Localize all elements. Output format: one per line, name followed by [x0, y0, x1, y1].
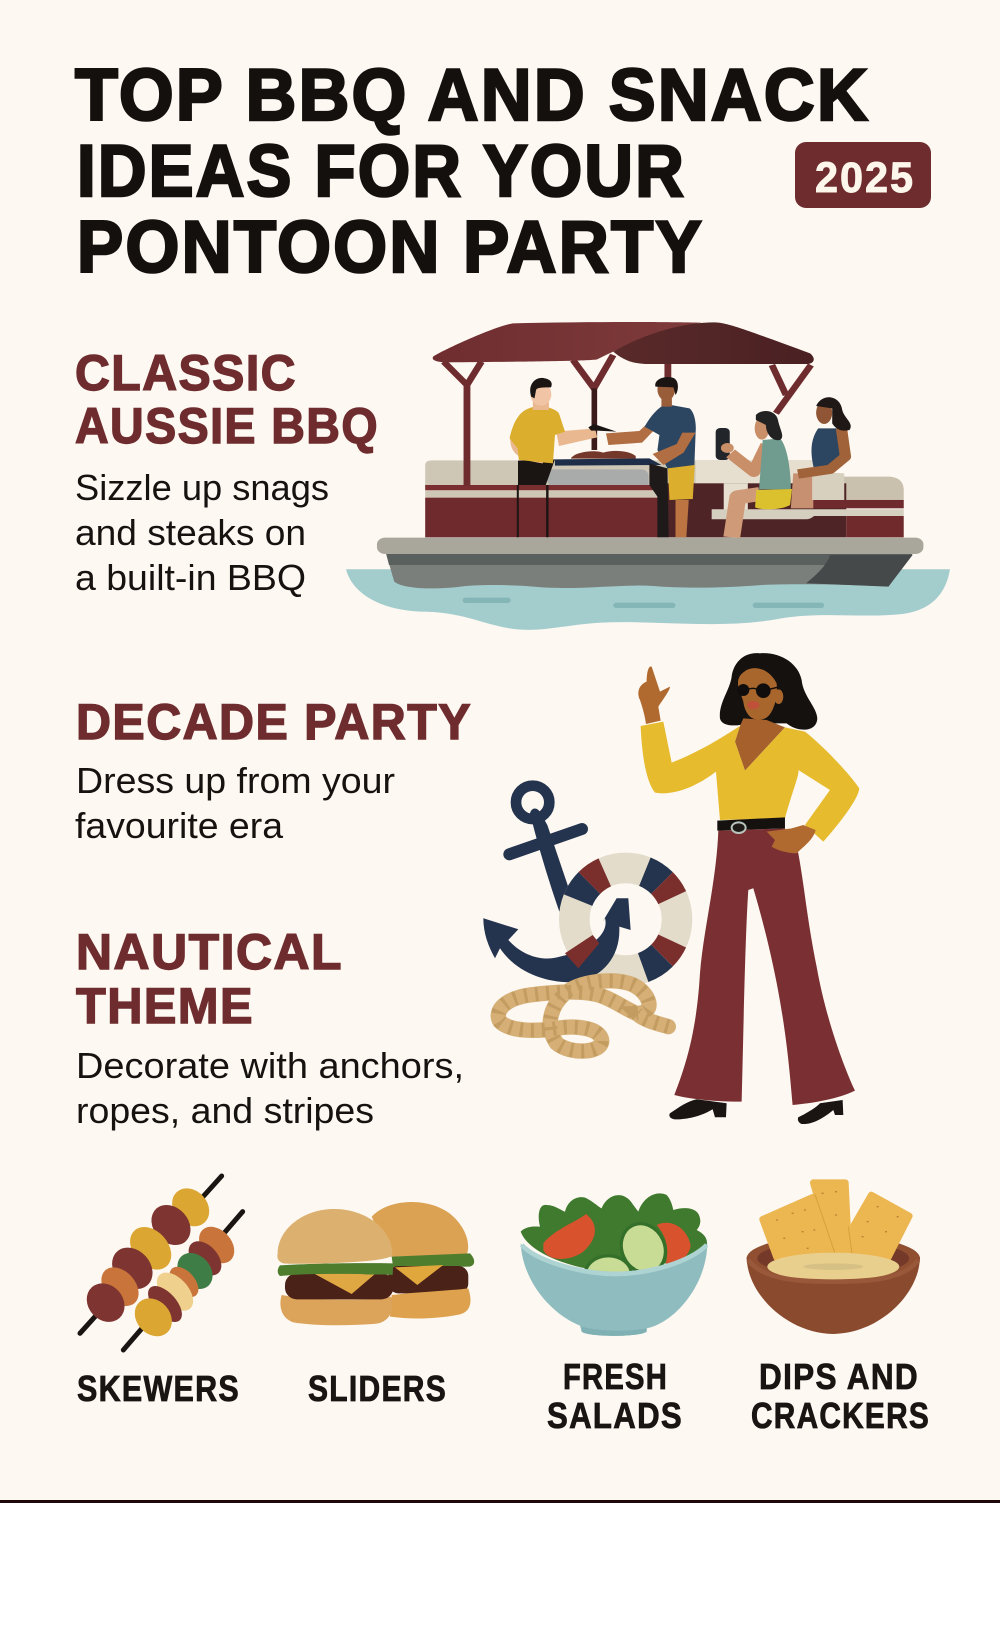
snack: dips and crackers	[747, 1183, 930, 1436]
icon: salad bowl	[521, 1193, 707, 1336]
text: decade party description: favourite era	[75, 805, 284, 846]
text: classic aussie bbq description: and steaks on	[75, 512, 306, 553]
yellow shirt	[641, 722, 859, 842]
label: dips and crackers: DIPS AND	[759, 1356, 919, 1397]
label: dips and crackers: CRACKERS	[751, 1395, 930, 1436]
section: classic aussie bbq	[75, 345, 379, 598]
title: TOP BBQ AND SNACK	[75, 55, 870, 136]
text: classic aussie bbq description: Sizzle up snags	[75, 467, 329, 508]
snack: fresh salads	[521, 1193, 707, 1436]
heading: classic aussie bbq: AUSSIE BBQ	[75, 398, 379, 454]
face and chest	[735, 668, 785, 771]
label: sliders: SLIDERS	[308, 1368, 447, 1409]
flared trousers	[674, 828, 855, 1105]
canopy and supports	[433, 322, 814, 486]
heading: classic aussie bbq	[75, 345, 379, 454]
snack: skewers	[77, 1176, 243, 1409]
raised hand	[638, 666, 670, 724]
person: seated woman in teal	[721, 411, 792, 537]
heading: nautical theme	[76, 924, 343, 1034]
heading: nautical theme: THEME	[76, 978, 254, 1034]
anchor shank and ring	[509, 786, 582, 912]
person: yellow shirt griller	[510, 378, 616, 485]
icon: skewers	[79, 1176, 243, 1350]
life ring	[553, 847, 698, 992]
hand on hip	[767, 825, 816, 853]
heading: nautical theme: NAUTICAL	[76, 924, 343, 980]
boat cabin panels	[425, 460, 904, 537]
title	[75, 55, 870, 288]
illustration: anchor, life ring and rope	[483, 786, 698, 1051]
illustration: pontoon boat with people at bbq	[346, 322, 950, 630]
text: decade party description: Dress up from your	[76, 760, 395, 801]
section: nautical theme	[76, 924, 464, 1131]
year badge	[795, 142, 931, 208]
icon: sliders	[277, 1202, 474, 1325]
life ring lower red stripe	[565, 935, 599, 968]
label: dips and crackers	[751, 1356, 930, 1436]
icon: dip bowl with crackers	[747, 1183, 920, 1334]
year badge: 2025	[815, 154, 915, 202]
label: fresh salads	[547, 1356, 683, 1436]
section: decade party	[75, 694, 472, 846]
text: nautical theme description	[76, 1045, 464, 1131]
hair	[720, 653, 817, 730]
speaker	[716, 428, 730, 460]
text: decade party description	[75, 760, 395, 846]
label: fresh salads: FRESH	[563, 1356, 668, 1397]
snack: sliders	[277, 1202, 474, 1409]
label: fresh salads: SALADS	[547, 1395, 683, 1436]
grill	[545, 451, 669, 537]
heading: classic aussie bbq: CLASSIC	[75, 345, 297, 401]
illustration: woman in retro outfit	[638, 653, 859, 1124]
boots	[669, 1099, 843, 1124]
belt	[717, 817, 785, 833]
person: seated woman in navy	[791, 397, 851, 508]
person: navy shirt griller	[606, 377, 696, 537]
water	[346, 569, 950, 630]
text: classic aussie bbq description	[75, 467, 329, 598]
text: nautical theme description: ropes, and stripes	[76, 1090, 374, 1131]
title: IDEAS FOR YOUR	[77, 131, 686, 212]
label: skewers: SKEWERS	[77, 1368, 240, 1409]
text: nautical theme description: Decorate with anchors,	[76, 1045, 464, 1086]
anchor flukes	[483, 898, 631, 982]
title: PONTOON PARTY	[77, 207, 704, 288]
boat hull	[377, 538, 923, 588]
heading: decade party: DECADE PARTY	[76, 694, 472, 750]
text: classic aussie bbq description: a built-in BBQ	[75, 557, 306, 598]
rope	[498, 981, 668, 1051]
